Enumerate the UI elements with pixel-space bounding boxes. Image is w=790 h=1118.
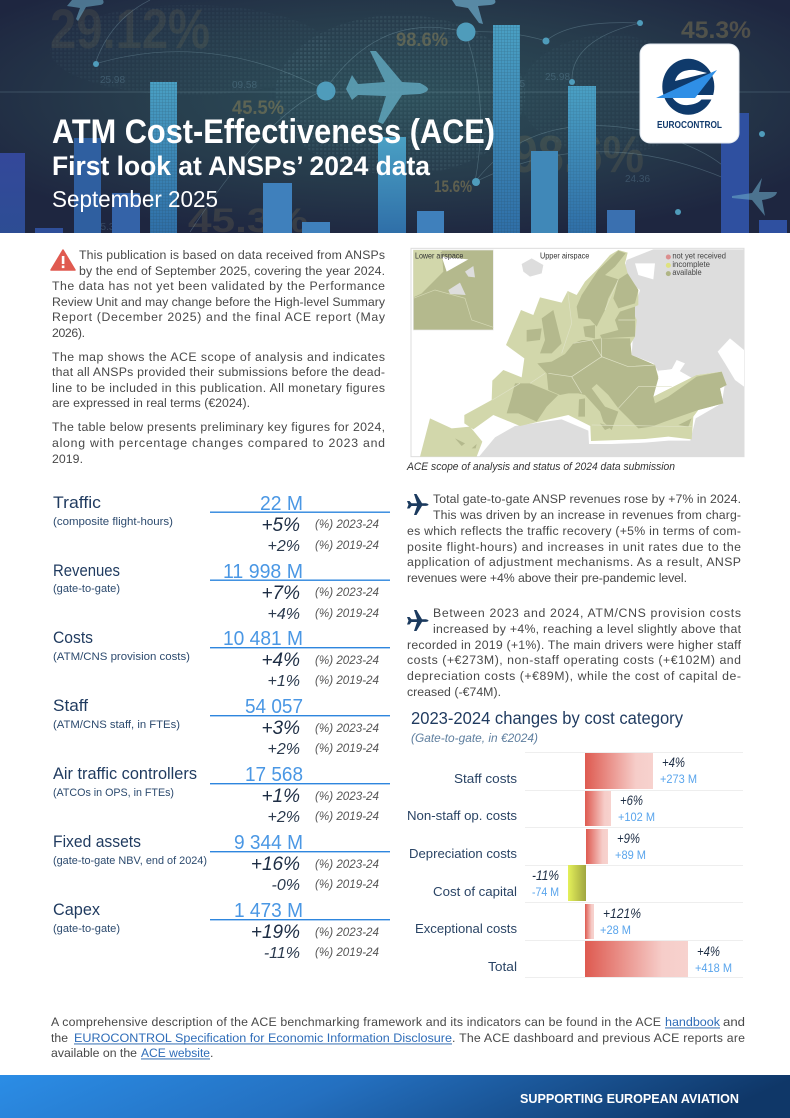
text block: costs commentary: costs (+€273M), non-staff operating costs (+€102M) and (407, 653, 741, 667)
row: fixed assets: Fixed assets (53, 833, 141, 851)
header banner (0, 0, 790, 240)
icon: plane 2 (407, 610, 428, 631)
bar: cost of capital: -74 M (532, 885, 559, 899)
row: fixed assets: 9 344 M (234, 831, 303, 854)
row: air traffic controllers: (ATCOs in OPS, in FTEs) (53, 787, 174, 799)
footer band (0, 1075, 790, 1118)
footer text block: the (51, 1031, 68, 1045)
title: ATM Cost-Effectiveness (ACE) (52, 113, 495, 151)
text block: introduction: that all ANSPs provided their submissions before the dead- (52, 365, 385, 379)
row: capex: (%) 2023-24 (315, 925, 379, 939)
bar: exceptional costs: Exceptional costs (415, 921, 517, 936)
header banner: 25.98 (100, 75, 125, 86)
logo: EUROCONTROL: EUROCONTROL (657, 120, 722, 131)
chart heading (411, 708, 683, 745)
borders (492, 279, 692, 427)
row: staff: (ATM/CNS staff, in FTEs) (53, 719, 180, 731)
map caption: ACE scope of analysis and status of 2024 data submission (406, 461, 675, 473)
legend: available (672, 267, 702, 277)
text block: introduction: line to be included in this publication. All monetary figures (52, 381, 385, 395)
row: capex: 1 473 M (234, 899, 303, 922)
bar: total: Total (488, 959, 517, 974)
text block: introduction: are expressed in real terms (€2024). (52, 396, 250, 410)
logo: EUROCONTROL (640, 44, 739, 143)
row: air traffic controllers: (%) 2019-24 (315, 809, 379, 823)
text block: introduction (52, 248, 386, 466)
row: air traffic controllers: +2% (268, 809, 300, 826)
row: traffic: Traffic (53, 494, 101, 512)
text block: revenues commentary: application of adjustment mechanisms. As a result, ANSP (407, 555, 741, 569)
text block: costs commentary: increased by +4%, reaching a level slightly above that (433, 622, 742, 636)
text block: introduction: Report (December 2025) and the final ACE report (May (52, 310, 386, 324)
bar: depreciation costs (409, 829, 646, 864)
legend: not yet received (672, 251, 726, 261)
bar: staff costs: +4% (662, 755, 685, 770)
scope: dark olive land (455, 251, 727, 448)
row: fixed assets: -0% (272, 877, 300, 894)
row: capex: (gate-to-gate) (53, 923, 120, 935)
text block: introduction: along with percentage changes compared to 2023 and (52, 436, 385, 450)
row: revenues: (%) 2023-24 (315, 585, 379, 599)
footer text block (51, 1015, 745, 1060)
footer text block: ACE website (141, 1046, 210, 1060)
header banner: 98.6% (512, 126, 644, 184)
row: staff: +3% (261, 718, 300, 739)
text block: introduction: by the end of September 2025, covering the year 2024. (79, 264, 385, 278)
row: capex: -11% (264, 945, 300, 962)
header banner: 45.3% (188, 202, 308, 240)
legend: incomplete (672, 259, 710, 269)
text block: costs commentary: recorded in 2019 (+1%). The main drivers were higher staff (407, 638, 742, 652)
title: September 2025 (52, 186, 218, 212)
bar: exceptional costs: +28 M (600, 923, 631, 937)
map: ACE scope of analysis: Lower airspace (415, 250, 464, 260)
row: revenues (53, 560, 390, 623)
text block: costs commentary: Between 2023 and 2024, ATM/CNS provision costs (433, 606, 741, 620)
row: revenues: (%) 2019-24 (315, 606, 379, 620)
scope: light olive airspace (420, 250, 727, 457)
row: costs: 10 481 M (223, 627, 303, 650)
row: fixed assets: (%) 2019-24 (315, 877, 379, 891)
row: staff: (%) 2019-24 (315, 741, 379, 755)
row: staff: 54 057 (245, 695, 303, 718)
row: traffic: (%) 2023-24 (315, 517, 379, 531)
bar: non-staff operating costs (407, 791, 655, 826)
row: air traffic controllers: +1% (261, 786, 300, 807)
bar: depreciation costs: Depreciation costs (409, 846, 517, 861)
footer text block: EUROCONTROL Specification for Economic Information Disclosure (74, 1031, 452, 1045)
row: costs: (ATM/CNS provision costs) (53, 651, 190, 663)
footer text block: . (210, 1046, 213, 1060)
text block: introduction: The map shows the ACE scope of analysis and indicates (52, 350, 385, 364)
footer text block: . The ACE dashboard and previous ACE reports are (452, 1031, 745, 1045)
row: revenues: (gate-to-gate) (53, 583, 120, 595)
bar: total: +418 M (695, 961, 732, 975)
bar: non-staff operating costs: +102 M (618, 810, 655, 824)
bar: non-staff operating costs: Non-staff op. costs (407, 808, 517, 823)
bar: staff costs (454, 753, 697, 789)
footer text block: and (723, 1015, 745, 1029)
row: fixed assets: (%) 2023-24 (315, 857, 379, 871)
row: fixed assets (53, 831, 390, 894)
text block: revenues commentary: revenues were +4% above their pre-pandemic level. (407, 571, 687, 585)
bar chart: changes by cost category (407, 752, 743, 978)
text block: costs commentary: creased (-€74M). (407, 685, 501, 699)
text block: introduction: Review Unit and may change before the High-level Summary (52, 295, 386, 309)
row: capex: +19% (251, 922, 300, 943)
row: costs: +1% (268, 673, 300, 690)
row: air traffic controllers: 17 568 (245, 763, 303, 786)
header banner: 15.6% (434, 177, 472, 196)
text block: introduction: The table below presents preliminary key figures for 2024, (52, 420, 385, 434)
bar: exceptional costs: +121% (603, 906, 641, 921)
text block: costs commentary: depreciation costs (+€89M), while the cost of capital de- (407, 669, 741, 683)
map: ACE scope of analysis (411, 248, 744, 457)
footer text block: available on the (51, 1046, 137, 1060)
footer text block: A comprehensive description of the ACE benchmarking framework and its indicators can be found in the ACE (51, 1015, 661, 1029)
footer band: SUPPORTING EUROPEAN AVIATION (520, 1092, 739, 1106)
header banner: 98.25 (500, 79, 525, 90)
bar: exceptional costs (415, 904, 641, 939)
row: staff: Staff (53, 697, 88, 715)
row: costs: (%) 2019-24 (315, 673, 379, 687)
text block: revenues commentary: posite flight-hours) and increases in unit rates due to the (407, 540, 741, 554)
text block: introduction: 2026). (52, 326, 85, 340)
header banner: 45.5% (232, 98, 284, 119)
row: traffic: (composite flight-hours) (53, 516, 173, 528)
text block: revenues commentary (407, 492, 741, 585)
row: traffic: 22 M (260, 492, 303, 515)
row: traffic: +5% (261, 515, 300, 536)
text block: revenues commentary: Total gate-to-gate ANSP revenues rose by +7% in 2024. (433, 492, 741, 506)
header banner: 45.3% (681, 17, 751, 44)
inset: lower airspace (413, 250, 493, 330)
text block: revenues commentary: es which reflects the traffic recovery (+5% in terms of com- (407, 524, 741, 538)
header banner: 98.6% (396, 30, 448, 51)
header banner: 25.98 (545, 72, 570, 83)
row: revenues: Revenues (53, 562, 120, 580)
row: staff (53, 695, 390, 758)
row: costs: +4% (261, 650, 300, 671)
row: costs: (%) 2023-24 (315, 653, 379, 667)
row: traffic (53, 492, 390, 555)
bar: staff costs: +273 M (660, 772, 697, 786)
row: traffic: +2% (268, 538, 300, 555)
icon: warning triangle (51, 250, 75, 270)
bar: cost of capital (433, 865, 586, 901)
row: costs: Costs (53, 629, 93, 647)
bar: total (488, 941, 732, 977)
text block: introduction: 2019. (52, 452, 83, 466)
title: First look at ANSPs’ 2024 data (52, 151, 431, 181)
title (52, 113, 495, 212)
chart heading: 2023-2024 changes by cost category (411, 708, 683, 728)
row: revenues: +4% (268, 606, 300, 623)
row: staff: +2% (268, 741, 300, 758)
text block: introduction: This publication is based on data received from ANSPs (79, 248, 385, 262)
row: traffic: (%) 2019-24 (315, 538, 379, 552)
row: air traffic controllers: (%) 2023-24 (315, 789, 379, 803)
land: non-scope grey areas (479, 249, 744, 457)
bar: depreciation costs: +89 M (615, 848, 646, 862)
icon: plane 1 (407, 494, 428, 515)
bar: total: +4% (697, 944, 720, 959)
row: fixed assets: +16% (251, 854, 300, 875)
row: revenues: +7% (261, 583, 300, 604)
bar: non-staff operating costs: +6% (620, 793, 643, 808)
row: capex: (%) 2019-24 (315, 945, 379, 959)
legend (666, 251, 726, 277)
bar: cost of capital: -11% (532, 868, 559, 883)
header banner: 05.36 (95, 222, 120, 233)
row: capex (53, 899, 390, 962)
footer text block: handbook (665, 1015, 721, 1029)
key figures table (53, 492, 390, 962)
map: ACE scope of analysis: Upper airspace (540, 251, 590, 261)
row: costs (53, 627, 390, 690)
row: air traffic controllers: Air traffic controllers (53, 765, 197, 783)
row: air traffic controllers (53, 763, 390, 826)
chart heading: (Gate-to-gate, in €2024) (411, 731, 538, 745)
header banner: 09.58 (232, 80, 257, 91)
bar: depreciation costs: +9% (617, 831, 640, 846)
row: capex: Capex (53, 901, 101, 919)
text block: introduction: The data has not yet been validated by the Performance (52, 279, 385, 293)
bar: cost of capital: Cost of capital (433, 884, 517, 899)
row: staff: (%) 2023-24 (315, 721, 379, 735)
bar: staff costs: Staff costs (454, 771, 517, 786)
header banner: 24.36 (625, 174, 650, 185)
text block: revenues commentary: This was driven by an increase in revenues from charg- (433, 508, 741, 522)
row: fixed assets: (gate-to-gate NBV, end of 2024) (53, 855, 207, 867)
text block: costs commentary (407, 606, 742, 699)
row: revenues: 11 998 M (223, 560, 303, 583)
